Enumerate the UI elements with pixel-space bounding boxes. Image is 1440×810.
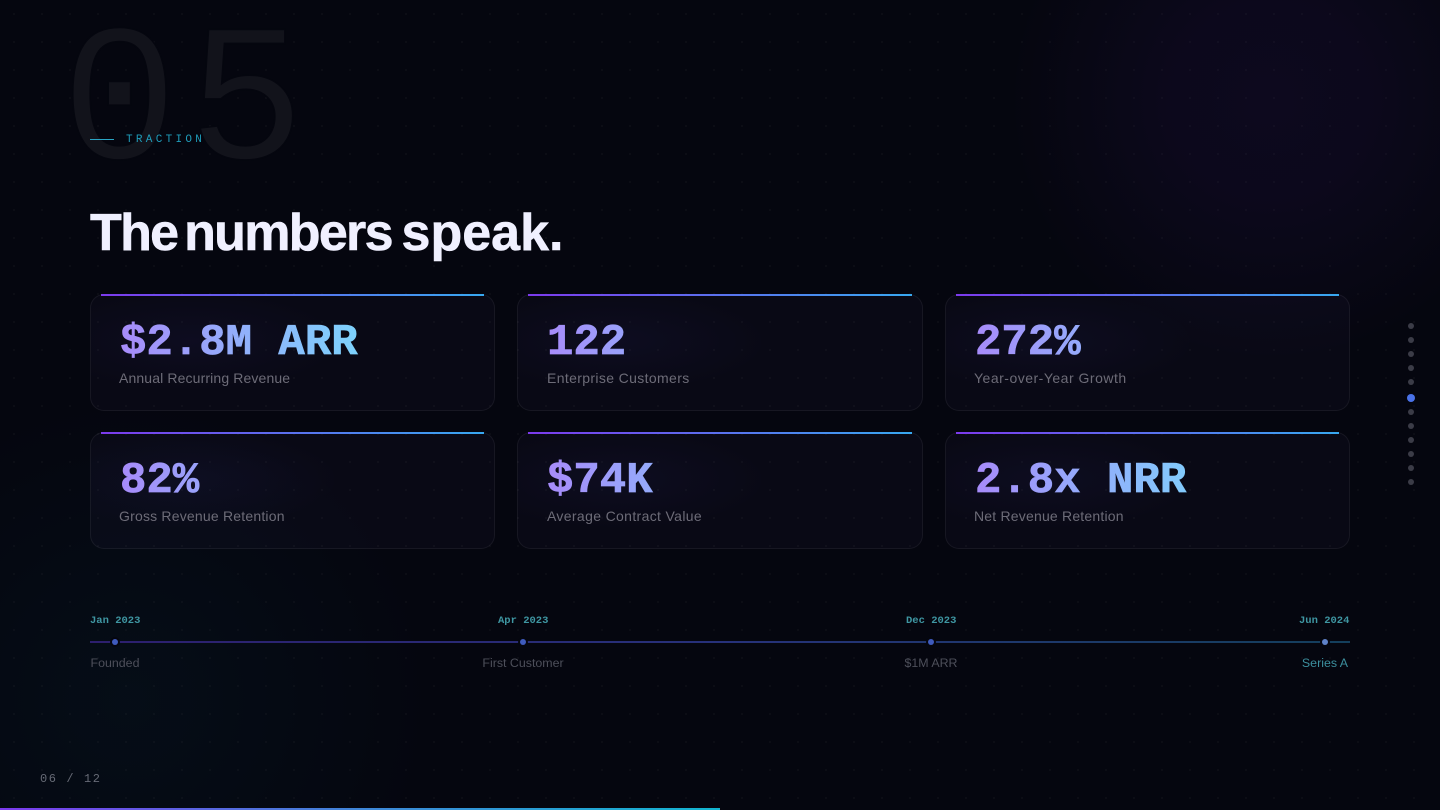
- metric card: NRR: [945, 432, 1350, 549]
- metric card: growth: 272%: [975, 318, 1081, 368]
- metric card: growth: [945, 294, 1350, 411]
- section label: TRACTION: [126, 134, 205, 146]
- metric card: growth: Year-over-Year Growth: [974, 370, 1127, 386]
- text: Founded: [91, 656, 139, 670]
- metric card: ARR: [90, 294, 495, 411]
- text: Jan 2023: [90, 615, 140, 627]
- title: The numbers speak.: [90, 204, 563, 262]
- text: Dec 2023: [906, 615, 956, 627]
- metric card: customers: 122: [547, 318, 626, 368]
- progress bar: [0, 808, 720, 810]
- metric card: NRR: Net Revenue Retention: [974, 508, 1124, 524]
- page number: 06 / 12: [40, 772, 102, 786]
- text: First Customer: [482, 656, 564, 670]
- text: Series A: [1302, 656, 1348, 670]
- metric card: contract value: Average Contract Value: [547, 508, 702, 524]
- metric card: retention: [90, 432, 495, 549]
- text: $1M ARR: [904, 656, 958, 670]
- metric card: customers: [517, 294, 923, 411]
- text: Jun 2024: [1299, 615, 1349, 627]
- metric card: retention: Gross Revenue Retention: [119, 508, 285, 524]
- metric card: ARR: $2.8M ARR: [120, 318, 358, 368]
- metric card: NRR: 2.8x NRR: [975, 456, 1186, 506]
- metric card: customers: Enterprise Customers: [547, 370, 690, 386]
- timeline: [90, 615, 1350, 670]
- metric card: retention: 82%: [120, 456, 199, 506]
- metric card: contract value: [517, 432, 923, 549]
- navigation dots: [1407, 323, 1415, 485]
- metric card: ARR: Annual Recurring Revenue: [119, 370, 290, 386]
- large section number: 05: [61, 0, 315, 217]
- metric card: contract value: $74K: [547, 456, 653, 506]
- text: Apr 2023: [498, 615, 548, 627]
